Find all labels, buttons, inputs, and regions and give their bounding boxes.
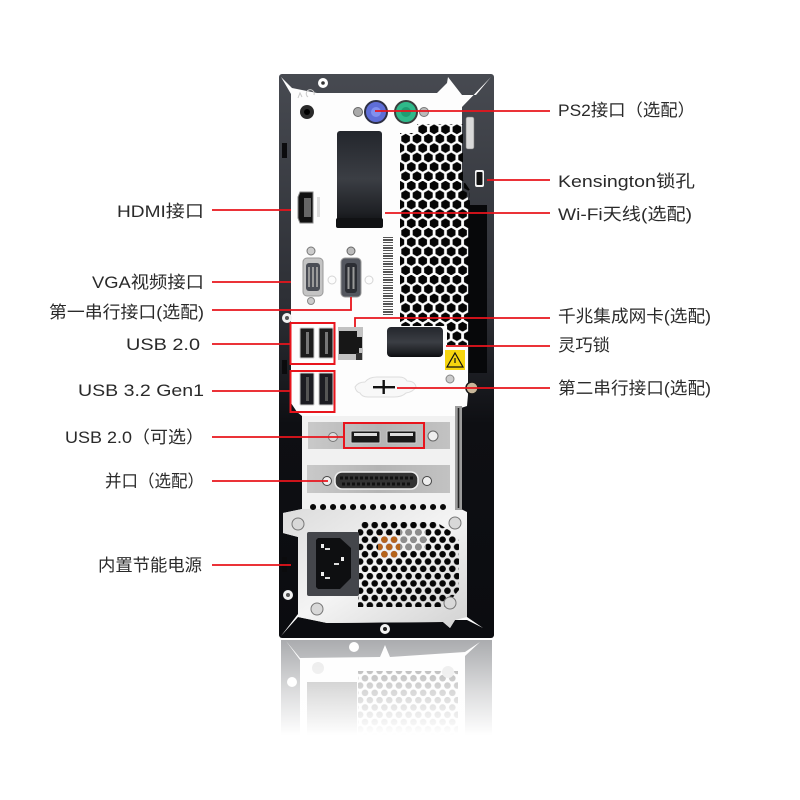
callout: Kensington: Kensington锁孔 bbox=[558, 172, 695, 191]
callout: first serial port: 第一串行接口(选配) bbox=[49, 303, 204, 322]
callout: HDMI: HDMI接口 bbox=[117, 202, 204, 221]
ventilation honeycomb bbox=[400, 124, 470, 345]
power socket bbox=[307, 532, 359, 596]
USB 3.2 ports bbox=[300, 373, 333, 405]
fan tint bbox=[378, 535, 400, 558]
audio icons bbox=[298, 90, 314, 98]
hole row bbox=[313, 504, 443, 510]
right black slot bbox=[469, 205, 487, 373]
callout: USB 3.2 Gen1 bbox=[78, 371, 334, 412]
reflected socket bbox=[307, 682, 357, 742]
reflection fade bbox=[278, 639, 496, 746]
reflected holes bbox=[287, 642, 359, 687]
callout: first serial port bbox=[49, 297, 351, 322]
callout: power supply: 内置节能电源 bbox=[98, 556, 202, 575]
reflected case body bbox=[281, 640, 492, 745]
callout: parallel port: 并口（选配） bbox=[105, 472, 204, 491]
expansion bay backing bbox=[302, 416, 460, 509]
side screws bbox=[282, 313, 292, 323]
reflected vent bbox=[358, 671, 458, 737]
top strip hole bbox=[318, 78, 328, 88]
case reflection bbox=[278, 639, 496, 746]
port icons bbox=[328, 276, 373, 284]
Kensington slot icon bbox=[475, 170, 484, 187]
lock module bbox=[387, 327, 443, 357]
Wi-Fi module box bbox=[336, 131, 383, 228]
callout: optional USB 2.0 bbox=[65, 423, 424, 448]
audio jack bbox=[300, 105, 314, 119]
first serial port bbox=[341, 247, 361, 297]
callout: PS2: PS2接口（选配） bbox=[558, 101, 695, 120]
latch bbox=[466, 117, 474, 149]
PSU vent bbox=[358, 522, 459, 607]
PSU screws bbox=[292, 517, 461, 615]
computer case rear bbox=[279, 74, 494, 638]
callout: gigabit LAN bbox=[355, 307, 711, 327]
bracket bar bbox=[455, 406, 462, 510]
side notches bbox=[282, 143, 287, 572]
callout: optional USB 2.0: USB 2.0（可选） bbox=[65, 428, 204, 447]
reflected plate bbox=[286, 641, 480, 745]
USB 2.0 ports bbox=[300, 328, 333, 358]
VGA port bbox=[303, 247, 323, 304]
HDMI port bbox=[298, 192, 320, 223]
case body bbox=[279, 74, 494, 638]
PS2 ports bbox=[354, 101, 428, 123]
callout: USB 2.0: USB 2.0 bbox=[126, 335, 200, 354]
callout: second serial port: 第二串行接口(选配) bbox=[558, 379, 711, 398]
reflected screws bbox=[312, 662, 454, 678]
callout: Wi-Fi: Wi-Fi天线(选配) bbox=[558, 205, 692, 224]
metal I/O plate bbox=[281, 77, 491, 636]
callout: VGA: VGA视频接口 bbox=[92, 273, 204, 292]
expansion card: USB bbox=[308, 422, 450, 449]
plate screw bbox=[466, 382, 478, 394]
expansion card: parallel bbox=[307, 465, 450, 493]
callout: USB 2.0 bbox=[126, 323, 334, 364]
callout: lock: 灵巧锁 bbox=[558, 336, 610, 355]
warning label bbox=[445, 350, 465, 370]
PSU plate shading bbox=[283, 509, 467, 628]
Ethernet port bbox=[338, 327, 363, 360]
second serial knockout bbox=[355, 377, 416, 397]
callout: USB 3.2 Gen1: USB 3.2 Gen1 bbox=[78, 381, 204, 400]
barcode bbox=[383, 237, 393, 316]
callout: gigabit LAN: 千兆集成网卡(选配) bbox=[558, 307, 711, 326]
